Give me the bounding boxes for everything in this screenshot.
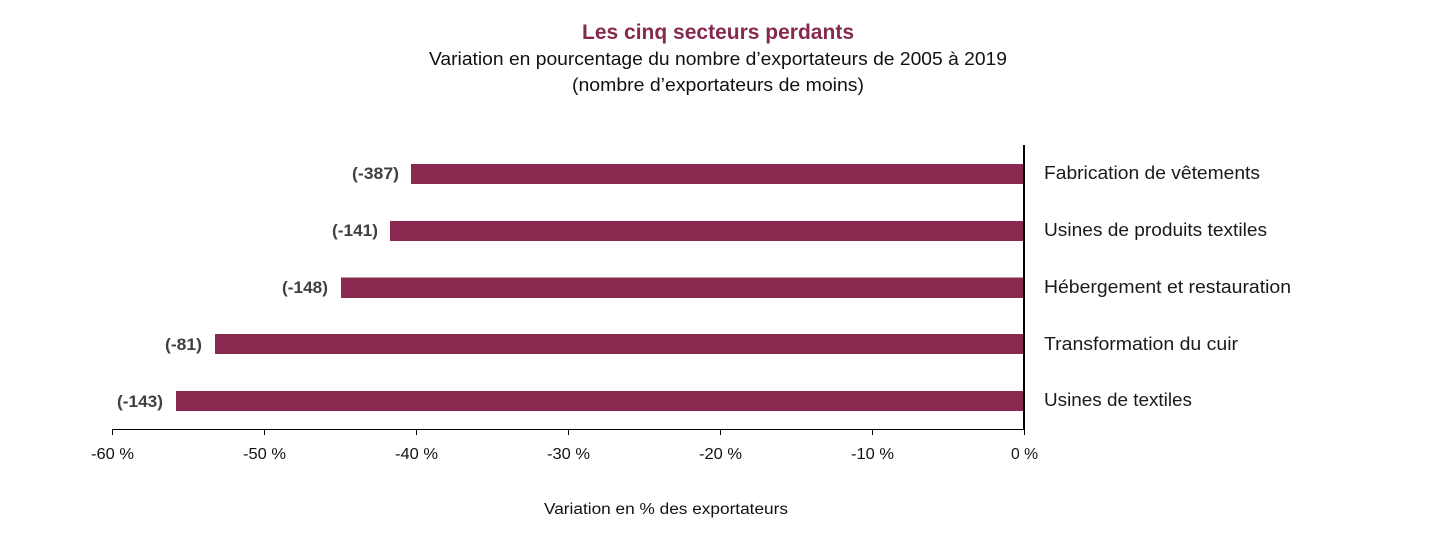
value: -81: (-81) [165,336,202,354]
tick: 0 %: 0 % [1011,446,1038,463]
bar: Transformation du cuir [215,334,1024,354]
value: -143: (-143) [117,393,163,411]
tick: -30 %: -30 % [547,446,590,463]
axes [112,145,1024,435]
category: Fabrication de vêtements: Fabrication de vêtements [1044,163,1260,183]
bars [176,164,1024,411]
horizontal axis [112,430,1024,435]
bar chart [91,145,1291,518]
axis title: Variation en % des exportateurs [544,501,788,518]
tick: -20 %: -20 % [699,446,742,463]
value: -387: (-387) [352,165,399,183]
tick: -40 %: -40 % [395,446,438,463]
value labels [117,165,399,411]
bar: Hébergement et restauration [341,278,1024,298]
heading block [429,21,1007,95]
value: -148: (-148) [282,279,328,297]
value: -141: (-141) [332,222,378,240]
bar: Usines de textiles [176,391,1024,411]
tick: -60 %: -60 % [91,446,134,463]
tick: -50 %: -50 % [243,446,286,463]
category: Transformation du cuir: Transformation du cuir [1044,334,1238,354]
bar: Fabrication de vêtements [411,164,1024,184]
tick labels [91,446,1038,463]
category: Hébergement et restauration: Hébergement et restauration [1044,277,1291,297]
bar: Usines de produits textiles [390,221,1024,241]
category: Usines de produits textiles: Usines de produits textiles [1044,220,1267,240]
subtitle line 1: Variation en pourcentage du nombre d’exportateurs de 2005 à 2019 [429,49,1007,69]
tick: -10 %: -10 % [851,446,894,463]
category: Usines de textiles: Usines de textiles [1044,390,1192,410]
title: Les cinq secteurs perdants [582,21,854,44]
category labels [1044,163,1291,410]
vertical axis [1023,145,1025,430]
subtitle line 2: (nombre d’exportateurs de moins) [572,75,864,95]
